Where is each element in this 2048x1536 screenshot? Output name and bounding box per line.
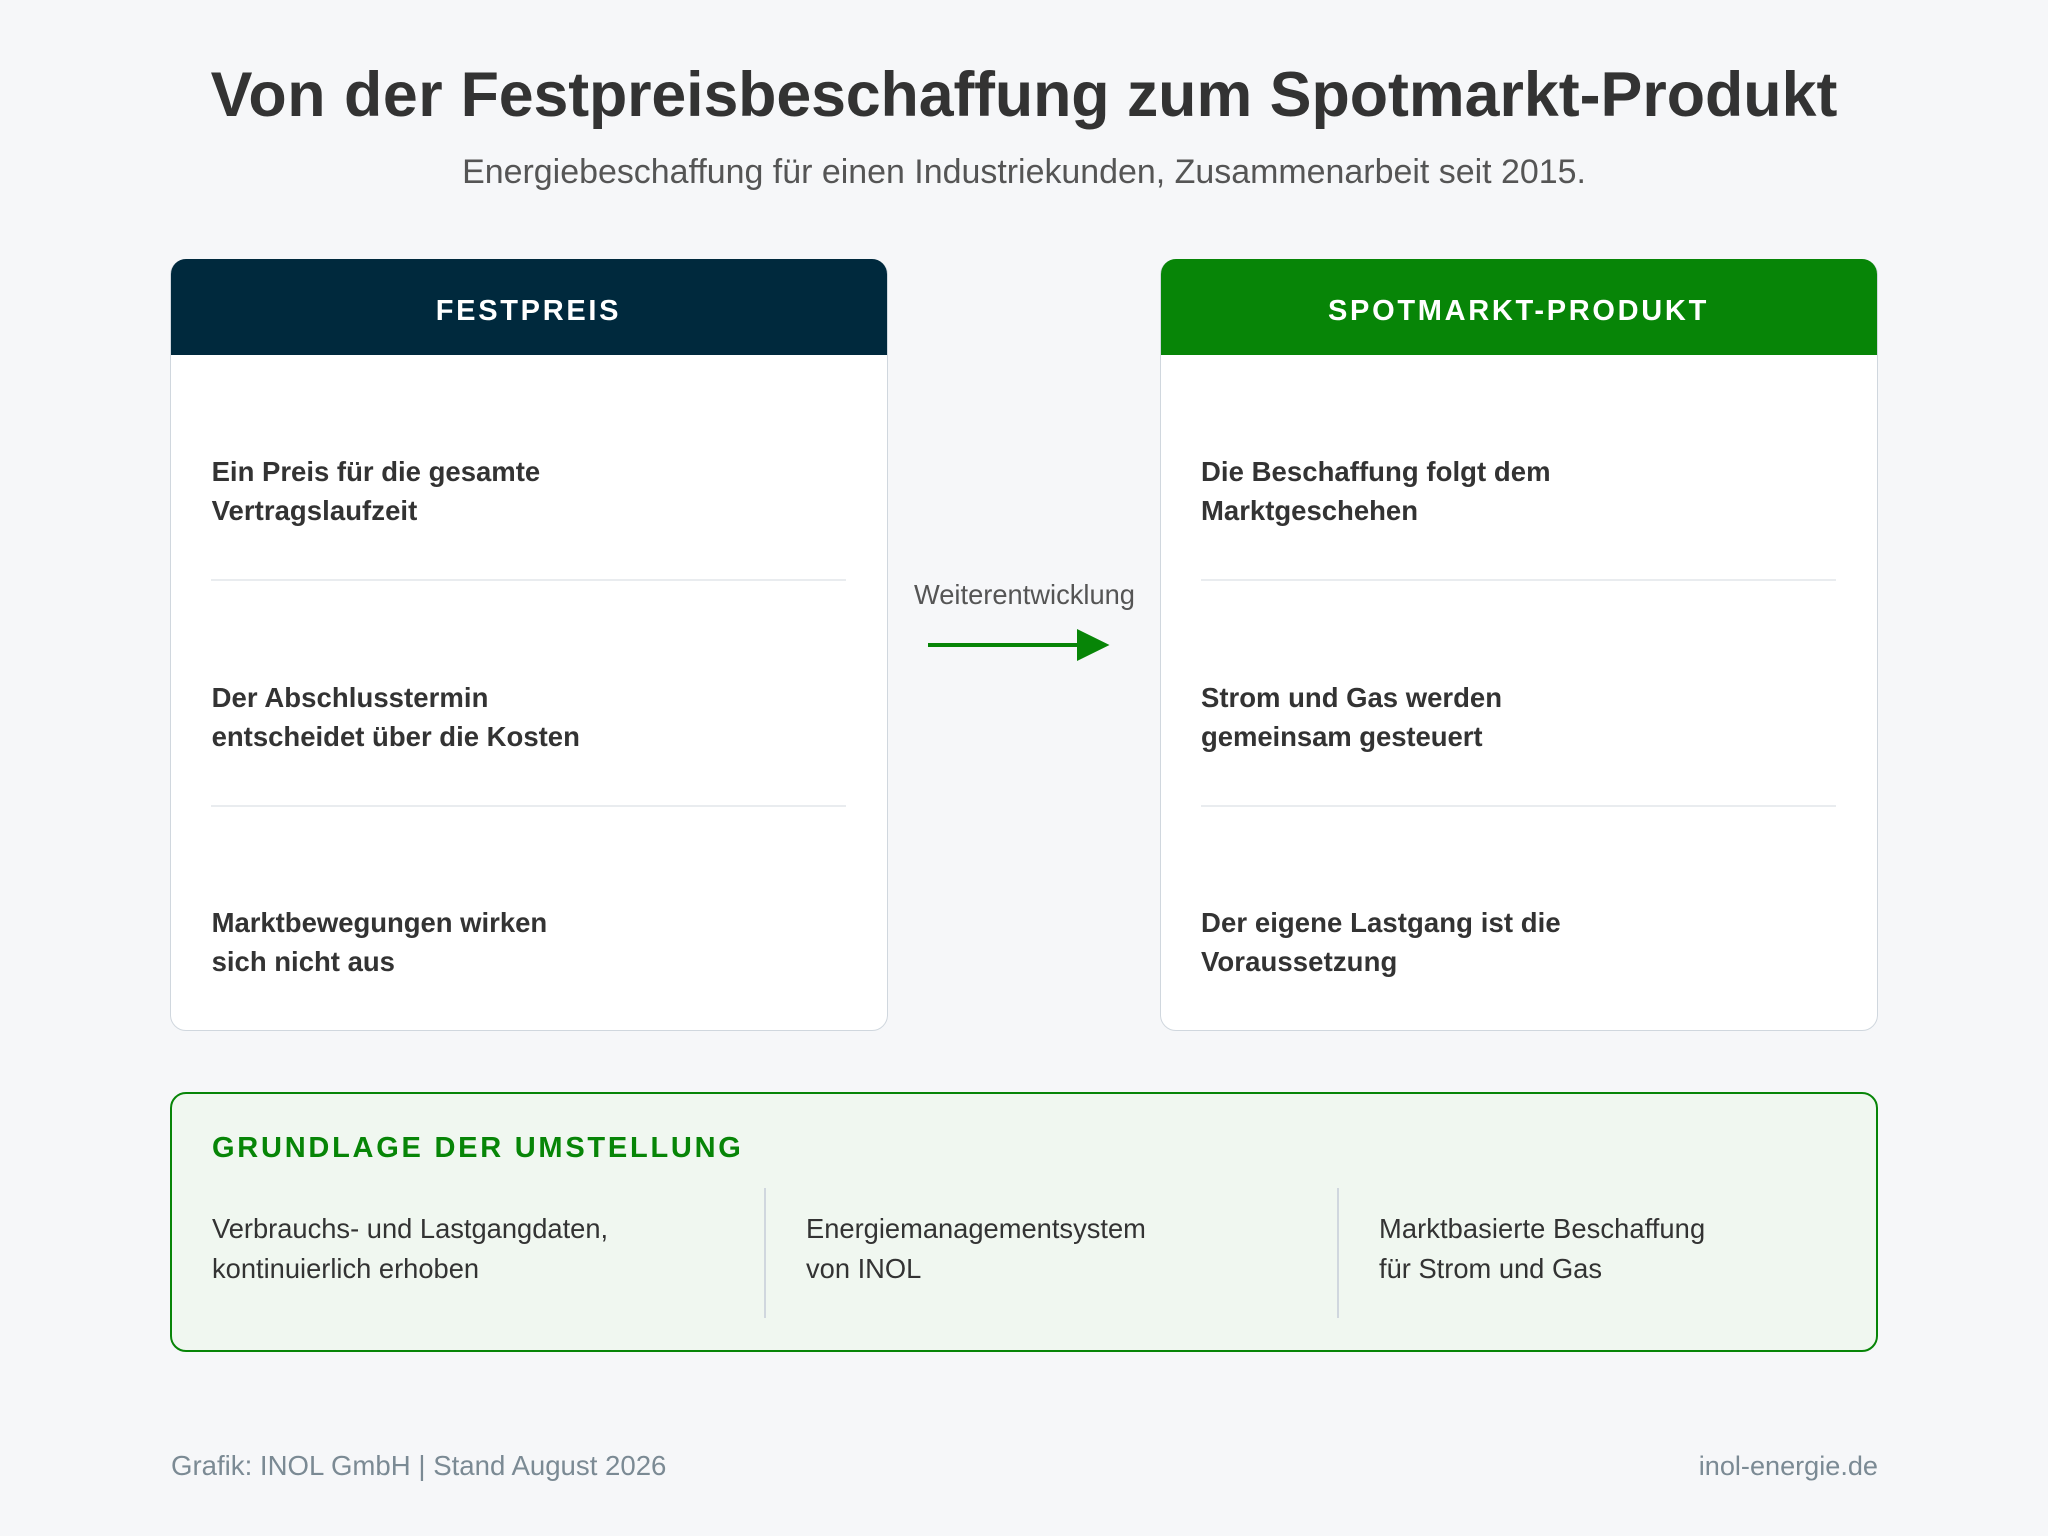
item: Strom und Gas: gemeinsam gesteuert (1201, 721, 1482, 752)
footer: source: Grafik: INOL GmbH | Stand August 2026 (171, 1450, 666, 1481)
panel header: Festpreis (170, 258, 886, 354)
item: Marktgeschehen: Die Beschaffung folgt dem (1201, 456, 1551, 487)
item: Marktgeschehen: Marktgeschehen (1201, 495, 1418, 526)
text block: Energiemanagementsystem: Energiemanagementsystem (806, 1213, 1146, 1244)
item: Marktbewegungen: Marktbewegungen wirken (212, 907, 547, 938)
arrow (928, 629, 1110, 661)
item: Marktgeschehen (1201, 456, 1551, 526)
text block: Daten (212, 1213, 608, 1284)
item: Marktbewegungen (212, 907, 547, 977)
item: Lastgang (1201, 907, 1561, 977)
text block: Marktbasierte Beschaffung: Marktbasierte Beschaffung (1379, 1213, 1705, 1244)
text block: Energiemanagementsystem: von INOL (806, 1252, 921, 1284)
subtitle: Energiebeschaffung für einen Industriekunden, Zusammenarbeit seit 2015. (462, 153, 1586, 191)
footer: website: inol-energie.de (1699, 1450, 1878, 1481)
heading: GRUNDLAGE DER UMSTELLUNG (212, 1132, 744, 1164)
text block: Daten: kontinuierlich erhoben (212, 1252, 479, 1284)
item: Abschlusstermin: entscheidet über die Kosten (212, 721, 580, 752)
arrow label: Weiterentwicklung (914, 579, 1135, 610)
panel header: Spotmarkt-Produkt (1160, 258, 1876, 354)
item: Ein Preis: Vertragslaufzeit (212, 495, 417, 526)
item: Ein Preis: Ein Preis für die gesamte (212, 456, 540, 487)
item: Abschlusstermin (212, 682, 580, 752)
text block: Marktbasierte Beschaffung (1379, 1213, 1705, 1284)
panel: Grundlage der Umstellung (170, 1092, 1878, 1352)
panel header: Spotmarkt-Produkt: SPOTMARKT-PRODUKT (1328, 294, 1709, 326)
panel header: Festpreis: FESTPREIS (436, 294, 621, 326)
item: Strom und Gas (1201, 682, 1502, 752)
title: Von der Festpreisbeschaffung zum Spotmarkt-Produkt (211, 60, 1837, 130)
panel: Festpreis (170, 259, 888, 1031)
item: Lastgang: Voraussetzung (1201, 946, 1397, 977)
text block: Daten: Verbrauchs- und Lastgangdaten, (212, 1213, 608, 1244)
item: Ein Preis (212, 456, 540, 526)
text block: Marktbasierte Beschaffung: für Strom und Gas (1379, 1252, 1602, 1284)
item: Marktbewegungen: sich nicht aus (212, 946, 395, 977)
panel: Spotmarkt-Produkt (1160, 259, 1878, 1031)
item: Strom und Gas: Strom und Gas werden (1201, 682, 1502, 713)
text block: Energiemanagementsystem (806, 1213, 1146, 1284)
item: Abschlusstermin: Der Abschlusstermin (212, 682, 489, 713)
item: Lastgang: Der eigene Lastgang ist die (1201, 907, 1561, 938)
